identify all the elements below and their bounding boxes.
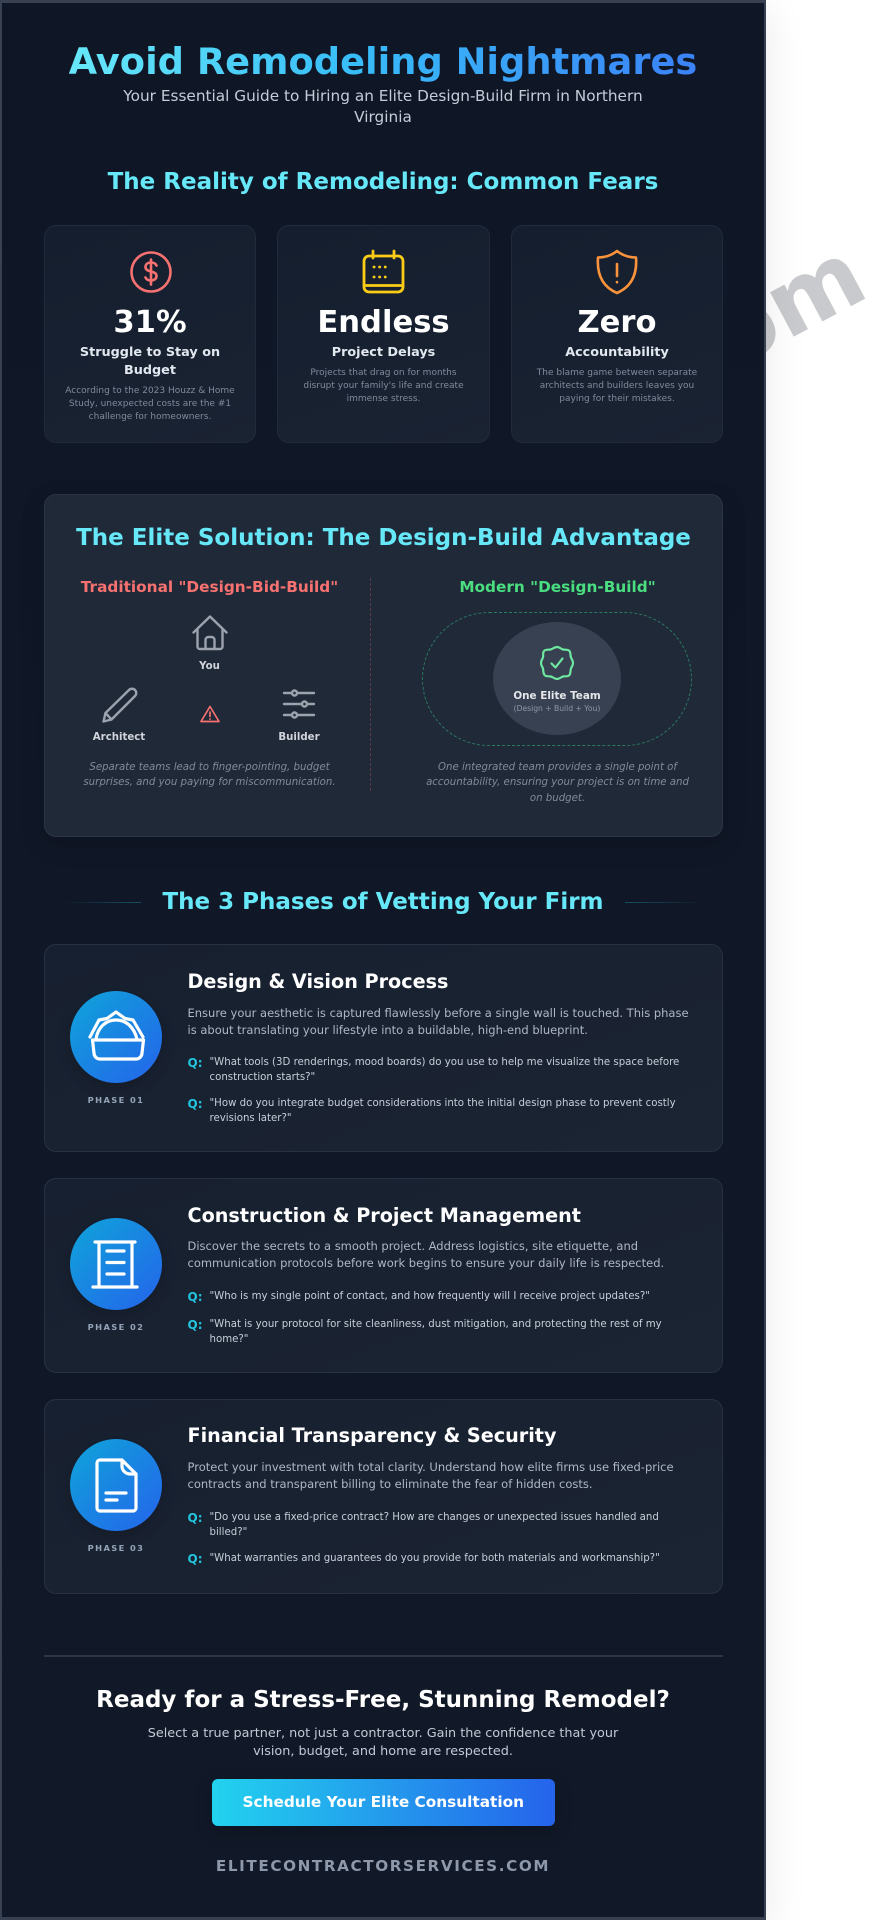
heading: phase 1: Design & Vision Process bbox=[188, 970, 448, 993]
question 1 text: "What tools (3D renderings, mood boards) do you use to help me visualize the space before bbox=[210, 1057, 679, 1068]
question 2 text: "What warranties and guarantees do you provide for both materials and workmanship?" bbox=[210, 1553, 660, 1564]
icon: shield bbox=[596, 250, 638, 294]
stat: Zero bbox=[577, 305, 657, 340]
question 1 text: "Do you use a fixed-price contract? How are changes or unexpected issues handled and bbox=[210, 1512, 659, 1523]
question 2 text: "What is your protocol for site cleanliness, dust mitigation, and protecting the rest of my bbox=[210, 1319, 662, 1330]
description: paying for their mistakes. bbox=[559, 394, 675, 404]
label: phase 2: PHASE 02 bbox=[88, 1322, 144, 1332]
website: ELITECONTRACTORSERVICES.COM bbox=[216, 1857, 550, 1875]
caption: traditional: surprises, and you paying for miscommunication. bbox=[83, 777, 336, 788]
description bbox=[536, 368, 697, 404]
panel: phase 3 bbox=[44, 1399, 723, 1594]
icon: calendar bbox=[362, 250, 404, 294]
panel: fear card budget bbox=[44, 225, 256, 443]
icon: dollar bbox=[130, 251, 172, 293]
question 2 text: home?" bbox=[210, 1334, 248, 1345]
label: phase 3: PHASE 03 bbox=[88, 1543, 144, 1553]
title: Avoid Remodeling Nightmares bbox=[69, 40, 697, 83]
label: you: You bbox=[199, 661, 220, 672]
description: architects and builders leaves you bbox=[540, 381, 694, 391]
description: According to the 2023 Houzz & Home bbox=[65, 386, 235, 396]
body: phase 3 bbox=[188, 1460, 674, 1491]
label: Struggle to Stay on bbox=[80, 345, 220, 360]
label: design build you: (Design + Build + You) bbox=[514, 704, 600, 713]
question 2 text bbox=[210, 1098, 676, 1124]
question 2 text: "How do you integrate budget considerations into the initial design phase to prevent costly bbox=[210, 1098, 676, 1109]
body: phase 2: communication protocols before work begins to ensure your daily life is respected. bbox=[188, 1256, 664, 1270]
panel: fear card accountability bbox=[511, 225, 723, 443]
description bbox=[303, 368, 464, 404]
caption: modern: One integrated team provides a single point of bbox=[438, 762, 677, 773]
heading: common fears: The Reality of Remodeling: Common Fears bbox=[108, 169, 658, 195]
question 2: Q: bbox=[188, 1097, 202, 1111]
question 1 text bbox=[210, 1512, 659, 1538]
divider bbox=[370, 578, 371, 791]
icon: house bbox=[192, 615, 228, 650]
body: phase 2: Discover the secrets to a smooth project. Address logistics, site etiquette, and bbox=[188, 1238, 638, 1252]
description: Study, unexpected costs are the #1 bbox=[69, 399, 231, 409]
subtitle: Virginia bbox=[354, 108, 412, 126]
heading: phase 2: Construction & Project Management bbox=[188, 1204, 581, 1227]
label: Project Delays bbox=[332, 345, 435, 360]
icon: badge check bbox=[540, 646, 574, 680]
label: one elite team: One Elite Team bbox=[513, 690, 601, 702]
section title: The 3 Phases of Vetting Your Firm bbox=[162, 889, 604, 915]
heading: call to action: Ready for a Stress-Free, Stunning Remodel? bbox=[96, 1687, 670, 1713]
decorative line right bbox=[625, 902, 704, 903]
question 2: Q: bbox=[188, 1318, 202, 1332]
label bbox=[80, 345, 220, 378]
subheading: traditional: Traditional "Design-Bid-Build" bbox=[81, 578, 338, 596]
subtitle bbox=[123, 87, 643, 126]
footer divider bbox=[44, 1655, 723, 1657]
label: architect: Architect bbox=[93, 732, 145, 743]
body: phase 1: is about translating your lifestyle into a buildable, high-end blueprint. bbox=[188, 1023, 588, 1037]
label: Accountability bbox=[565, 345, 669, 360]
description: disrupt your family's life and create bbox=[303, 381, 464, 391]
panel: phase 2 bbox=[44, 1178, 723, 1373]
description: immense stress. bbox=[347, 394, 420, 404]
panel: fear card delays bbox=[277, 225, 490, 443]
body: phase 1 bbox=[188, 1006, 689, 1037]
question 1 text: billed?" bbox=[210, 1527, 247, 1538]
body: call to action: vision, budget, and home are respected. bbox=[253, 1744, 513, 1758]
body: call to action: Select a true partner, not just a contractor. Gain the confidence that your bbox=[148, 1726, 618, 1740]
panel: design-build solution bbox=[44, 494, 723, 837]
question 2 text: revisions later?" bbox=[210, 1113, 292, 1124]
caption: traditional bbox=[83, 762, 336, 788]
description: Projects that drag on for months bbox=[310, 368, 457, 378]
body: phase 3: contracts and transparent billing to eliminate the fear of hidden costs. bbox=[188, 1477, 593, 1491]
body: phase 2 bbox=[188, 1238, 664, 1270]
caption: modern bbox=[426, 762, 689, 804]
icon: phase 1 bbox=[70, 991, 162, 1083]
subheading: modern: Modern "Design-Build" bbox=[459, 578, 656, 596]
description: challenge for homeowners. bbox=[89, 412, 211, 422]
icon: pencil bbox=[102, 688, 138, 723]
heading: solution: The Elite Solution: The Design-Build Advantage bbox=[76, 525, 691, 551]
question 1: Q: bbox=[188, 1056, 202, 1070]
caption: modern: on budget. bbox=[530, 793, 585, 804]
button bbox=[212, 1779, 555, 1826]
label: phase 1: PHASE 01 bbox=[88, 1095, 144, 1105]
label: Budget bbox=[124, 363, 176, 378]
caption: traditional: Separate teams lead to finger-pointing, budget bbox=[89, 762, 330, 773]
icon: warning bbox=[200, 706, 220, 722]
watermark: com bbox=[643, 220, 880, 415]
heading: phase 3: Financial Transparency & Security bbox=[188, 1424, 556, 1447]
question 1 text: construction starts?" bbox=[210, 1072, 315, 1083]
question 1: Q: bbox=[188, 1290, 202, 1304]
team circle bbox=[493, 622, 621, 735]
decorative line left bbox=[62, 902, 141, 903]
question 1: Q: bbox=[188, 1511, 202, 1525]
diagram: one elite team bbox=[422, 612, 692, 746]
icon: sliders bbox=[282, 689, 316, 719]
stat: Endless bbox=[317, 305, 450, 340]
body: call to action bbox=[148, 1726, 618, 1758]
question 1 text bbox=[210, 1057, 679, 1083]
button: Schedule Your Elite Consultation bbox=[242, 1793, 524, 1811]
question 2: Q: bbox=[188, 1552, 202, 1566]
icon: phase 2 bbox=[70, 1218, 162, 1310]
body: phase 1: Ensure your aesthetic is captured flawlessly before a single wall is touched. This phase bbox=[188, 1006, 689, 1020]
icon: phase 3 bbox=[70, 1439, 162, 1531]
description: The blame game between separate bbox=[537, 368, 697, 378]
stat: 31% bbox=[113, 305, 187, 340]
question 2 text bbox=[210, 1319, 662, 1345]
caption: modern: accountability, ensuring your project is on time and bbox=[426, 777, 689, 788]
body: phase 3: Protect your investment with total clarity. Understand how elite firms use fixed-price bbox=[188, 1460, 674, 1474]
subtitle: Your Essential Guide to Hiring an Elite Design-Build Firm in Northern bbox=[123, 87, 643, 105]
label: builder: Builder bbox=[278, 732, 320, 743]
description bbox=[65, 386, 235, 422]
question 1 text: "Who is my single point of contact, and how frequently will I receive project updates?" bbox=[210, 1291, 650, 1302]
panel: phase 1 bbox=[44, 944, 723, 1152]
